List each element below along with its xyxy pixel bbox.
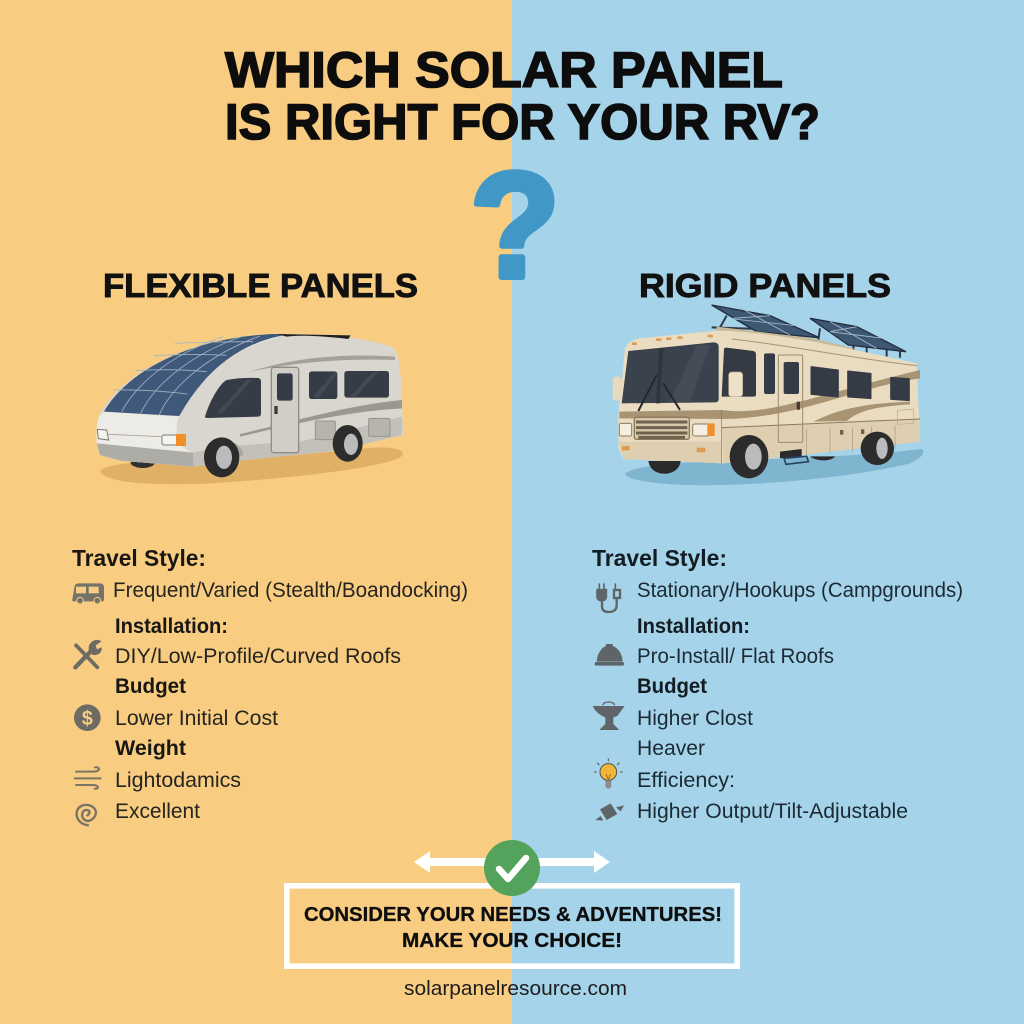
icons: rigid column — [593, 583, 625, 821]
text block: flexible panel attributes: Weight — [115, 737, 186, 760]
icons: flexible column — [72, 583, 104, 825]
text block: flexible panel attributes: Excellent — [115, 800, 200, 823]
illustration: flexible RV — [97, 334, 403, 484]
icon: camper — [72, 583, 104, 604]
text block: rigid panel attributes: Budget — [637, 675, 707, 698]
title: IS RIGHT FOR YOUR RV? — [225, 94, 820, 150]
text block: flexible panel attributes: Lightodamics — [115, 769, 241, 792]
icon: wrench and screwdriver — [75, 641, 101, 667]
text block: flexible panel attributes: Budget — [115, 675, 186, 698]
text block: rigid panel attributes: Higher Output/Tilt-Adjustable — [637, 800, 908, 823]
text block: flexible panel attributes — [72, 545, 468, 823]
callout box — [287, 886, 737, 966]
panel: rigid background — [512, 0, 1024, 1024]
title: WHICH SOLAR PANEL — [225, 42, 783, 98]
callout box: CONSIDER YOUR NEEDS & ADVENTURES! — [304, 904, 722, 926]
icon: adjustable panel — [595, 803, 624, 821]
illustration: rigid RV — [613, 305, 923, 485]
text block: flexible panel attributes: Lower Initial Cost — [115, 707, 278, 730]
icon: dollar coin — [74, 704, 101, 731]
icon: dollar coin: $ — [82, 708, 93, 730]
icon: anvil — [593, 702, 625, 730]
icon: wind — [75, 767, 101, 789]
icon: question mark: ? — [470, 141, 560, 309]
icon: light bulb — [594, 758, 623, 789]
panel: flexible background — [0, 0, 512, 1024]
icon: green check — [484, 840, 540, 896]
text block: rigid panel attributes: Stationary/Hookups (Campgrounds) — [637, 579, 963, 602]
text block: flexible panel attributes: Frequent/Varied (Stealth/Boandocking) — [113, 579, 468, 602]
text block: rigid panel attributes: Pro-Install/ Flat Roofs — [637, 645, 834, 668]
text block: flexible panel attributes: Travel Style: — [72, 545, 206, 571]
heading: flexible panels: FLEXIBLE PANELS — [103, 267, 418, 304]
footer url: solarpanelresource.com — [404, 978, 627, 1000]
icon: power plug — [597, 583, 620, 612]
text block: rigid panel attributes: Installation: — [637, 615, 750, 638]
title — [225, 42, 820, 150]
heading: rigid panels: RIGID PANELS — [639, 267, 891, 304]
text block: rigid panel attributes: Heaver — [637, 737, 705, 760]
text block: rigid panel attributes: Higher Clost — [637, 707, 753, 730]
callout box: MAKE YOUR CHOICE! — [402, 930, 622, 952]
text block: rigid panel attributes — [592, 545, 963, 823]
icon: hard hat — [595, 644, 624, 666]
callout: double arrow — [414, 851, 610, 873]
text block: flexible panel attributes: DIY/Low-Profile/Curved Roofs — [115, 645, 401, 668]
icon: spiral — [77, 805, 96, 825]
text block: flexible panel attributes: Installation: — [115, 615, 228, 638]
text block: rigid panel attributes: Travel Style: — [592, 545, 727, 571]
text block: rigid panel attributes: Efficiency: — [637, 769, 735, 792]
